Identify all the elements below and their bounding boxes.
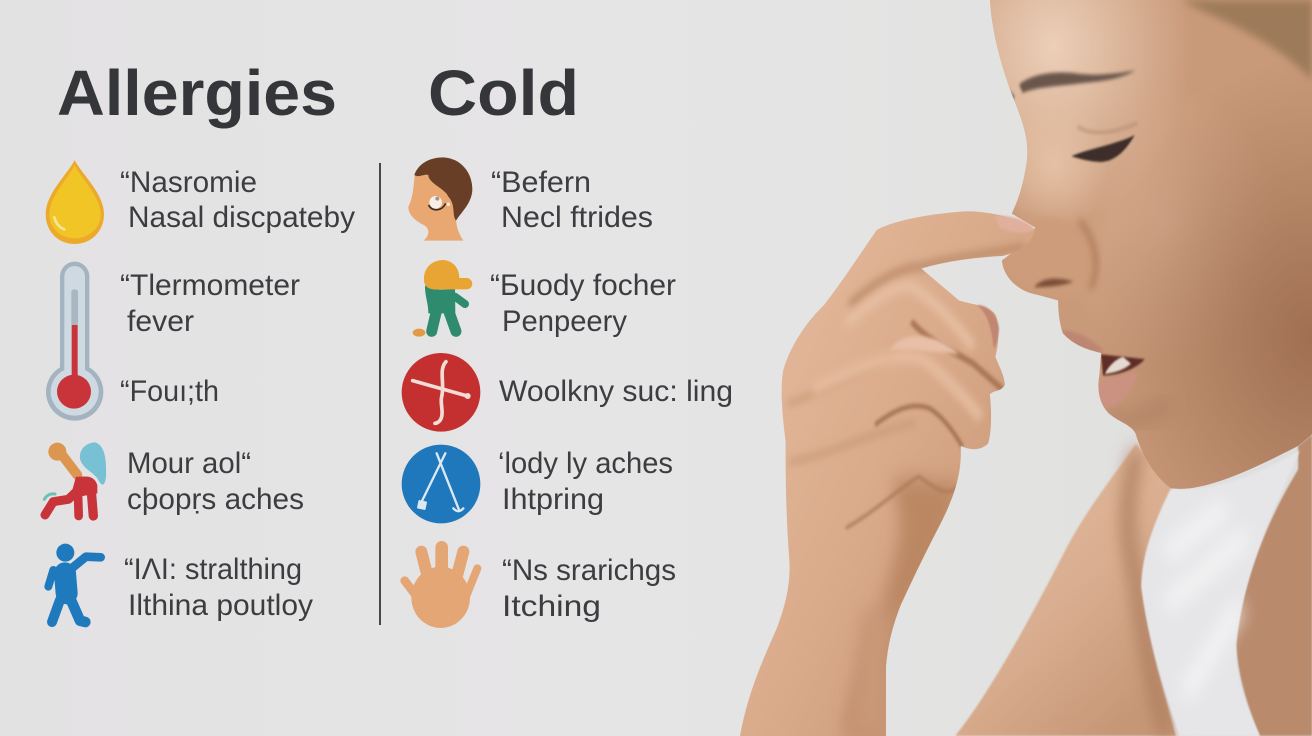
panel: allergies list bbox=[44, 160, 355, 622]
text: Befern: “Befern bbox=[491, 166, 591, 199]
upper lip bbox=[1061, 331, 1105, 353]
index finger underside bbox=[849, 246, 1025, 305]
text: fever: fever bbox=[127, 305, 194, 338]
lower lip bbox=[1098, 371, 1138, 407]
text: Mour aol: Mour aol“ bbox=[127, 447, 251, 480]
text: Nasromie: “Nasromie bbox=[120, 166, 257, 199]
icon: thermometer bbox=[46, 262, 103, 421]
text: Thermometer: “Tlermometer bbox=[120, 269, 300, 302]
panel: cold list bbox=[402, 157, 733, 628]
text: Ns srarichgs: “Ns srarichgs bbox=[502, 554, 676, 587]
text: Itching: Itching bbox=[502, 590, 601, 623]
under-lip shadow bbox=[1105, 404, 1170, 420]
pointing fingernail bbox=[995, 216, 1035, 232]
face bbox=[990, 0, 1312, 489]
text: Buody focher: “Бuody focher bbox=[490, 269, 676, 302]
text: Ilthina poutloy: Ilthina poutloy bbox=[128, 589, 313, 622]
photo: woman touching her nose bbox=[740, 0, 1312, 736]
text: Penpeery: Penpeery bbox=[502, 305, 627, 338]
white tank top bbox=[1141, 451, 1300, 736]
icon: aching figure bbox=[44, 442, 106, 516]
icon: blue figure bbox=[48, 544, 101, 622]
icon: open hand bbox=[405, 547, 477, 628]
chest and neck bbox=[1236, 434, 1312, 736]
icon: head profile bbox=[408, 157, 472, 241]
wrist right shadow bbox=[854, 616, 892, 731]
icon: red circle bbox=[402, 353, 480, 432]
hair bbox=[1181, 0, 1312, 80]
shoulder and arm bbox=[955, 444, 1176, 736]
finger highlights bbox=[846, 286, 973, 347]
nose wing crease bbox=[1079, 221, 1096, 289]
title: Cold: Cold bbox=[428, 57, 579, 129]
title: Allergies: Allergies bbox=[57, 57, 337, 129]
middle fingernail bbox=[977, 305, 999, 348]
text: stralthing: “IΛI: stralthing bbox=[124, 553, 302, 586]
icon: yellow drop bbox=[46, 160, 104, 244]
icon: green figure with cap bbox=[413, 260, 472, 337]
icon: blue circle bbox=[402, 445, 480, 523]
column divider bbox=[379, 163, 381, 625]
text: lody ly aches: ‘lody ly aches bbox=[498, 447, 673, 480]
text: cbopṛs aches: cþopṛs aches bbox=[127, 483, 304, 516]
text: Nasal discpateby: Nasal discpateby bbox=[128, 201, 355, 234]
nose underside shading bbox=[1002, 220, 1036, 263]
mouth bbox=[1101, 354, 1145, 376]
text: Ihtpring: Ihtpring bbox=[502, 483, 604, 516]
closed eye bbox=[1071, 135, 1135, 162]
middle finger underside bbox=[911, 322, 1003, 390]
finger shading bbox=[787, 246, 1025, 736]
text: Woolkny suc: ling: Woolkny suc: ling bbox=[499, 375, 733, 408]
hidden finger glimpse bbox=[890, 336, 959, 354]
text: Necl ftrides: Necl ftrides bbox=[501, 201, 653, 234]
teeth bbox=[1105, 357, 1131, 374]
eyebrow bbox=[1019, 70, 1136, 93]
back of hand shadow bbox=[842, 478, 963, 736]
eyelid crease bbox=[1077, 123, 1138, 133]
hand silhouette bbox=[740, 211, 1035, 736]
text: Fouth: “Fouı;th bbox=[120, 375, 219, 408]
nostril bbox=[1034, 279, 1074, 287]
hand with pointing finger bbox=[740, 211, 1035, 736]
ring finger underside bbox=[875, 406, 963, 447]
knuckle creases bbox=[788, 391, 816, 407]
